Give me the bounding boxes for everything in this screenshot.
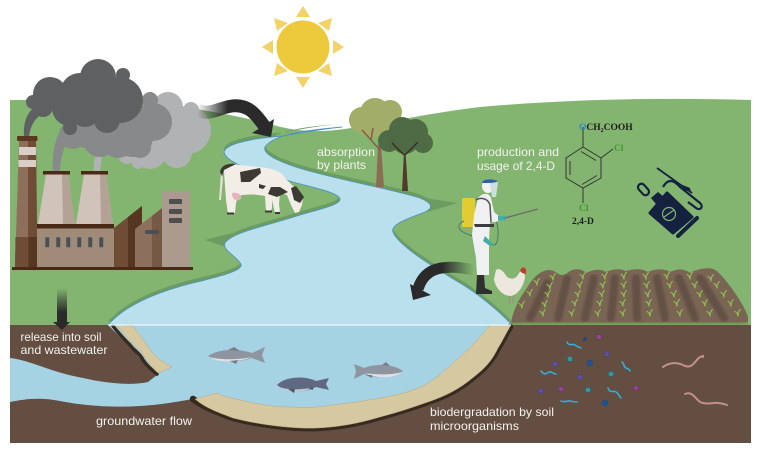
person spraying bbox=[459, 179, 538, 294]
main building bbox=[37, 224, 114, 267]
tank bbox=[650, 193, 692, 233]
backpack bbox=[462, 198, 475, 227]
label: biodegradation by soil microorganisms: microorganisms bbox=[430, 419, 519, 433]
label: absorption by plants: by plants bbox=[317, 158, 366, 172]
tower block bbox=[162, 191, 190, 267]
trees bbox=[349, 98, 433, 191]
label: production and usage of 2,4-D bbox=[477, 145, 559, 173]
neck and cap bbox=[651, 192, 664, 204]
river bbox=[108, 124, 512, 325]
medium smoke bbox=[53, 92, 172, 172]
icon: sprayer bbox=[637, 168, 702, 236]
squiggles bbox=[541, 342, 630, 402]
tree: light bbox=[349, 98, 402, 187]
base bar bbox=[678, 218, 697, 236]
fish 3 bbox=[354, 362, 403, 379]
dots bbox=[538, 334, 638, 406]
sand banks bbox=[117, 325, 511, 428]
underground soil bbox=[10, 325, 751, 443]
label: production and usage of 2,4-D: production and bbox=[477, 145, 559, 159]
label: release into soil and wastewater bbox=[20, 330, 108, 357]
fish 2 bbox=[277, 378, 329, 393]
hose bbox=[459, 221, 498, 245]
chemical structure: 2,4-D: Cl bbox=[579, 204, 589, 214]
hose bbox=[663, 181, 702, 209]
arrow: release into soil bbox=[53, 288, 70, 330]
boots bbox=[476, 275, 492, 294]
gloves bbox=[483, 216, 506, 246]
seedlings bbox=[519, 272, 740, 316]
water surface line bbox=[108, 324, 511, 326]
label: release into soil and wastewater: and wastewater bbox=[20, 343, 108, 357]
underground water pool and groundwater channel bbox=[10, 325, 512, 428]
label: production and usage of 2,4-D: usage of 2,4-D bbox=[477, 159, 555, 173]
chicken bbox=[494, 267, 526, 304]
label: biodegradation by soil microorganisms: biodergradation by soil bbox=[430, 405, 554, 419]
chemical structure: 2,4-D: COOH bbox=[604, 123, 633, 133]
dark smoke bbox=[24, 59, 143, 137]
sheds bbox=[114, 206, 142, 267]
chemical structure: 2,4-D: 2 bbox=[601, 128, 604, 134]
furrows bbox=[530, 278, 724, 318]
crop field bbox=[511, 268, 748, 324]
soil rim bbox=[511, 322, 748, 324]
factory bbox=[12, 136, 193, 270]
chemical structure: 2,4-D bbox=[566, 123, 633, 227]
wand bbox=[505, 209, 538, 218]
label: absorption by plants: absorption bbox=[317, 145, 375, 159]
label: release into soil and wastewater: release into soil bbox=[20, 330, 102, 344]
smoke clouds bbox=[24, 59, 211, 172]
label: absorption by plants bbox=[317, 145, 375, 172]
fish group bbox=[208, 347, 403, 393]
fish 1 bbox=[208, 347, 265, 364]
cooling towers bbox=[38, 174, 75, 224]
label: groundwater flow: groundwater flow bbox=[96, 414, 192, 428]
arrow: smoke to land bbox=[197, 106, 274, 137]
sun bbox=[262, 6, 344, 88]
chemical structure: 2,4-D: OCH bbox=[579, 123, 601, 133]
microorganisms bbox=[538, 334, 638, 406]
land: green hills bbox=[10, 99, 751, 325]
chimney bbox=[15, 141, 38, 267]
earthworms bbox=[663, 356, 727, 405]
gauge bbox=[662, 208, 676, 220]
label: biodegradation by soil microorganisms bbox=[430, 405, 554, 433]
light smoke bbox=[94, 92, 211, 172]
chemical structure: 2,4-D: 2,4-D bbox=[572, 217, 594, 227]
wand bbox=[657, 168, 692, 193]
dark bank edge bbox=[113, 326, 510, 428]
cow bbox=[219, 164, 304, 214]
tree: dark bbox=[378, 117, 433, 191]
suit bbox=[472, 194, 503, 275]
helmet and visor bbox=[482, 179, 494, 193]
chemical structure: 2,4-D: Cl bbox=[614, 144, 624, 154]
arrow: spray run-off to river bbox=[410, 267, 474, 300]
